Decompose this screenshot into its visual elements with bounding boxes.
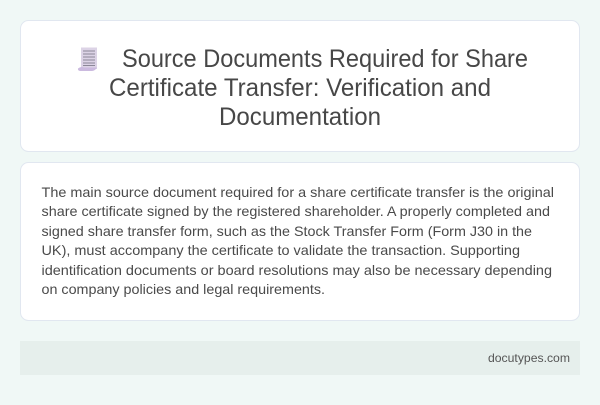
icon: document scroll bbox=[78, 48, 97, 71]
text block: description: UK), must accompany the certificate to validate the transaction. Supporting bbox=[42, 242, 520, 258]
footer bar bbox=[20, 341, 580, 375]
panel: title card bbox=[20, 20, 580, 152]
text block: description: signed share transfer form, such as the Stock Transfer Form (Form J30 in the bbox=[42, 223, 532, 239]
text block: description: share certificate signed by the registered shareholder. A properly completed and bbox=[42, 203, 550, 219]
text block: description bbox=[42, 184, 554, 297]
text block: description: The main source document required for a share certificate transfer is the original bbox=[42, 184, 554, 200]
title bbox=[109, 45, 528, 131]
text block: description: identification documents or board resolutions may also be necessary depending bbox=[42, 262, 552, 278]
title: Documentation bbox=[219, 103, 381, 131]
title: Source Documents Required for Share bbox=[122, 45, 528, 73]
title: Certificate Transfer: Verification and bbox=[109, 74, 491, 102]
panel: description card bbox=[20, 162, 580, 320]
text block: description: on company policies and legal requirements. bbox=[42, 281, 325, 297]
footer source text: docutypes.com bbox=[488, 351, 570, 365]
